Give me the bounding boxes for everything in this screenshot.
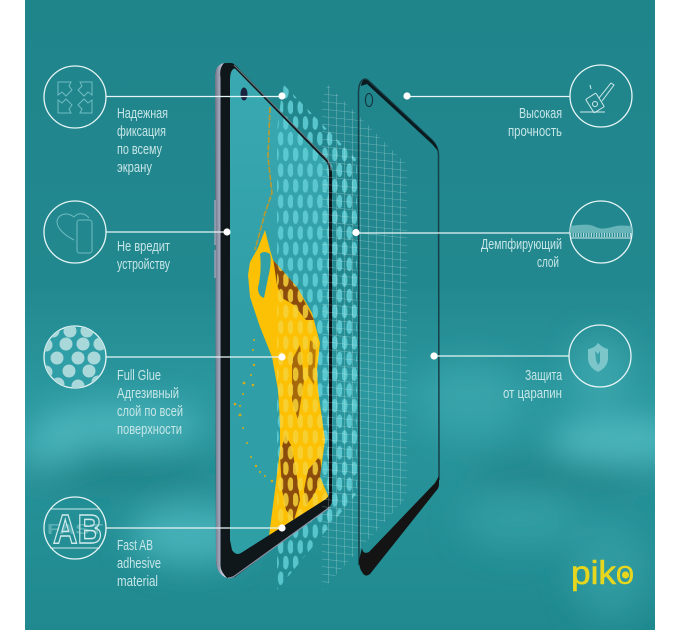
adhesive dot layer xyxy=(277,84,357,590)
text: right column 1: прочность xyxy=(508,123,562,140)
text: left column 1: Надежная xyxy=(117,105,168,122)
icon: shield xyxy=(569,325,631,387)
leader lines right xyxy=(352,92,570,360)
splash droplets xyxy=(234,339,273,482)
text: right column 3: от царапин xyxy=(503,385,562,402)
text: right column 1 xyxy=(508,105,562,140)
glass top black edge xyxy=(361,80,438,151)
text: left column 4: Fast AB xyxy=(117,537,153,554)
frame top highlight xyxy=(234,65,331,170)
icon: Fast AB xyxy=(44,497,106,559)
text: right column 3 xyxy=(503,367,562,402)
front camera xyxy=(240,88,248,100)
yellow dots on splash xyxy=(277,265,328,530)
icon: damping layer xyxy=(570,201,632,263)
text: left column 1 xyxy=(117,105,168,176)
splash stream xyxy=(255,107,272,250)
text: left column 4 xyxy=(117,537,161,590)
grid film layer xyxy=(322,84,407,590)
yellow paint splash xyxy=(234,107,337,540)
text: left column 3: Full Glue xyxy=(117,367,161,384)
logo: piko xyxy=(571,554,634,592)
glass camera ring xyxy=(365,94,373,106)
icon: Fast AB: AB xyxy=(53,506,102,552)
frame body xyxy=(215,63,332,578)
logo: piko: o xyxy=(616,554,634,592)
text: left column 3: поверхности xyxy=(117,421,182,438)
text: right column 2: слой xyxy=(537,254,559,271)
splash body xyxy=(248,230,330,536)
icon: adhesive dots xyxy=(43,325,107,389)
frame bottom highlight xyxy=(228,507,330,578)
glass outline xyxy=(358,79,439,565)
text: left column 3: слой по всей xyxy=(117,403,183,420)
splash shadows xyxy=(273,258,322,520)
side buttons xyxy=(214,200,216,278)
text: left column 1: по всему xyxy=(117,141,162,158)
text: right column 2: Демпфирующий xyxy=(481,236,562,253)
text: right column 3: Защита xyxy=(525,367,562,384)
icon: heart and phone xyxy=(44,201,106,263)
icon: hammer strength xyxy=(570,65,632,127)
text: right column 1: Высокая xyxy=(519,105,562,122)
text: left column 4: material xyxy=(117,573,158,590)
text: left column 3 xyxy=(117,367,183,438)
glass bottom black chin xyxy=(359,476,439,576)
logo: piko: pik xyxy=(571,554,617,591)
text: left column 1: экрану xyxy=(117,159,152,176)
text: left column 2: Не вредит xyxy=(117,238,170,255)
text: left column 2 xyxy=(117,238,170,273)
text: left column 2: устройству xyxy=(117,256,170,273)
text: left column 4: adhesive xyxy=(117,555,161,572)
text: right column 2 xyxy=(481,236,562,271)
icon: arrows full-screen fixation xyxy=(44,66,106,128)
front glass xyxy=(358,79,439,576)
phone screen xyxy=(230,68,329,554)
leader lines left xyxy=(106,92,286,532)
phone frame xyxy=(215,63,332,578)
frame side edge xyxy=(215,63,227,578)
text: left column 3: Адгезивный xyxy=(117,385,179,402)
icon: Fast AB: FAST xyxy=(47,521,103,538)
text: left column 1: фиксация xyxy=(117,123,166,140)
